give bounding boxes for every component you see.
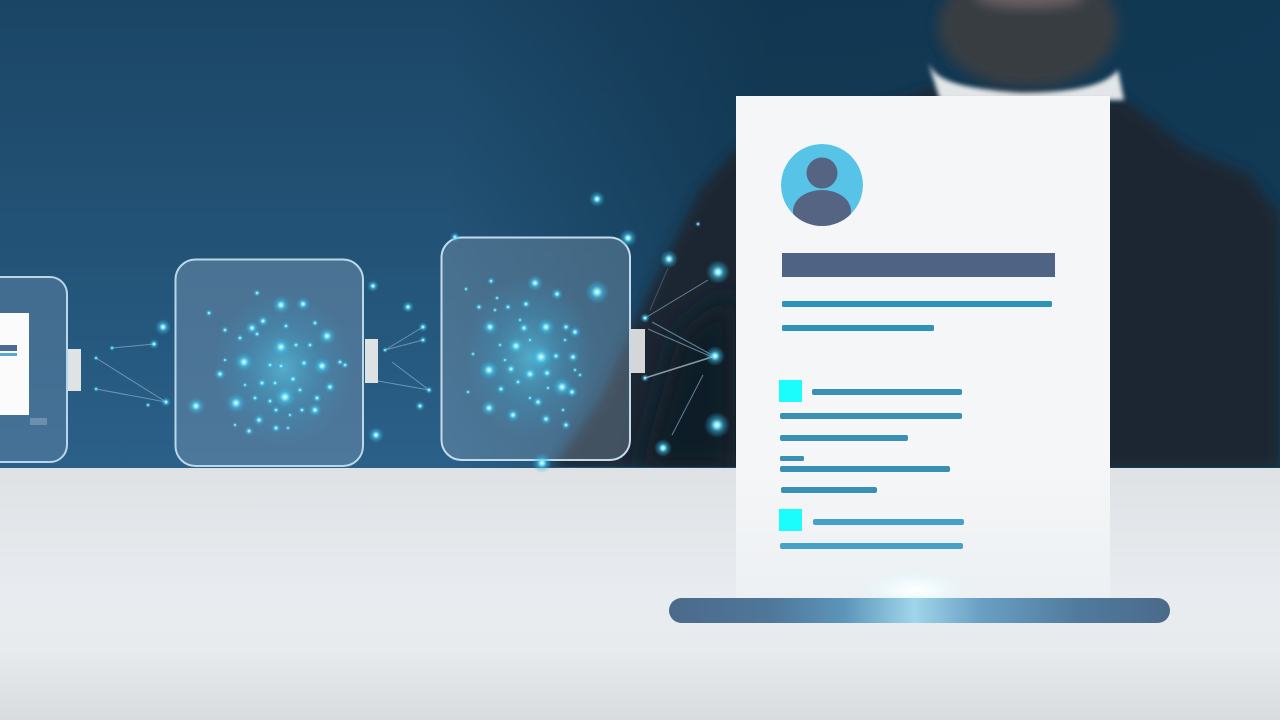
section 1	[779, 380, 962, 493]
background wall	[0, 0, 1280, 470]
name bar	[782, 253, 1055, 277]
card 3: data particle panel	[442, 238, 630, 460]
connector: card 3	[631, 329, 645, 373]
summary lines	[782, 301, 1052, 331]
connector: card 2	[365, 339, 378, 383]
resume document	[736, 96, 1110, 606]
card 1: partly cropped panel with resume	[0, 277, 67, 462]
mini resume page	[0, 313, 29, 415]
floor / desk surface	[0, 468, 1280, 720]
glow above base bar	[855, 568, 975, 612]
card 2: data particle panel	[176, 260, 363, 466]
connector: card 1	[68, 349, 81, 391]
blurred person in suit	[550, 0, 1280, 470]
particle cloud	[463, 275, 609, 440]
network lines and nodes between cards	[93, 191, 730, 473]
avatar	[781, 144, 863, 232]
section 2	[779, 509, 964, 549]
particle cloud	[187, 289, 353, 446]
base bar	[669, 598, 1170, 623]
